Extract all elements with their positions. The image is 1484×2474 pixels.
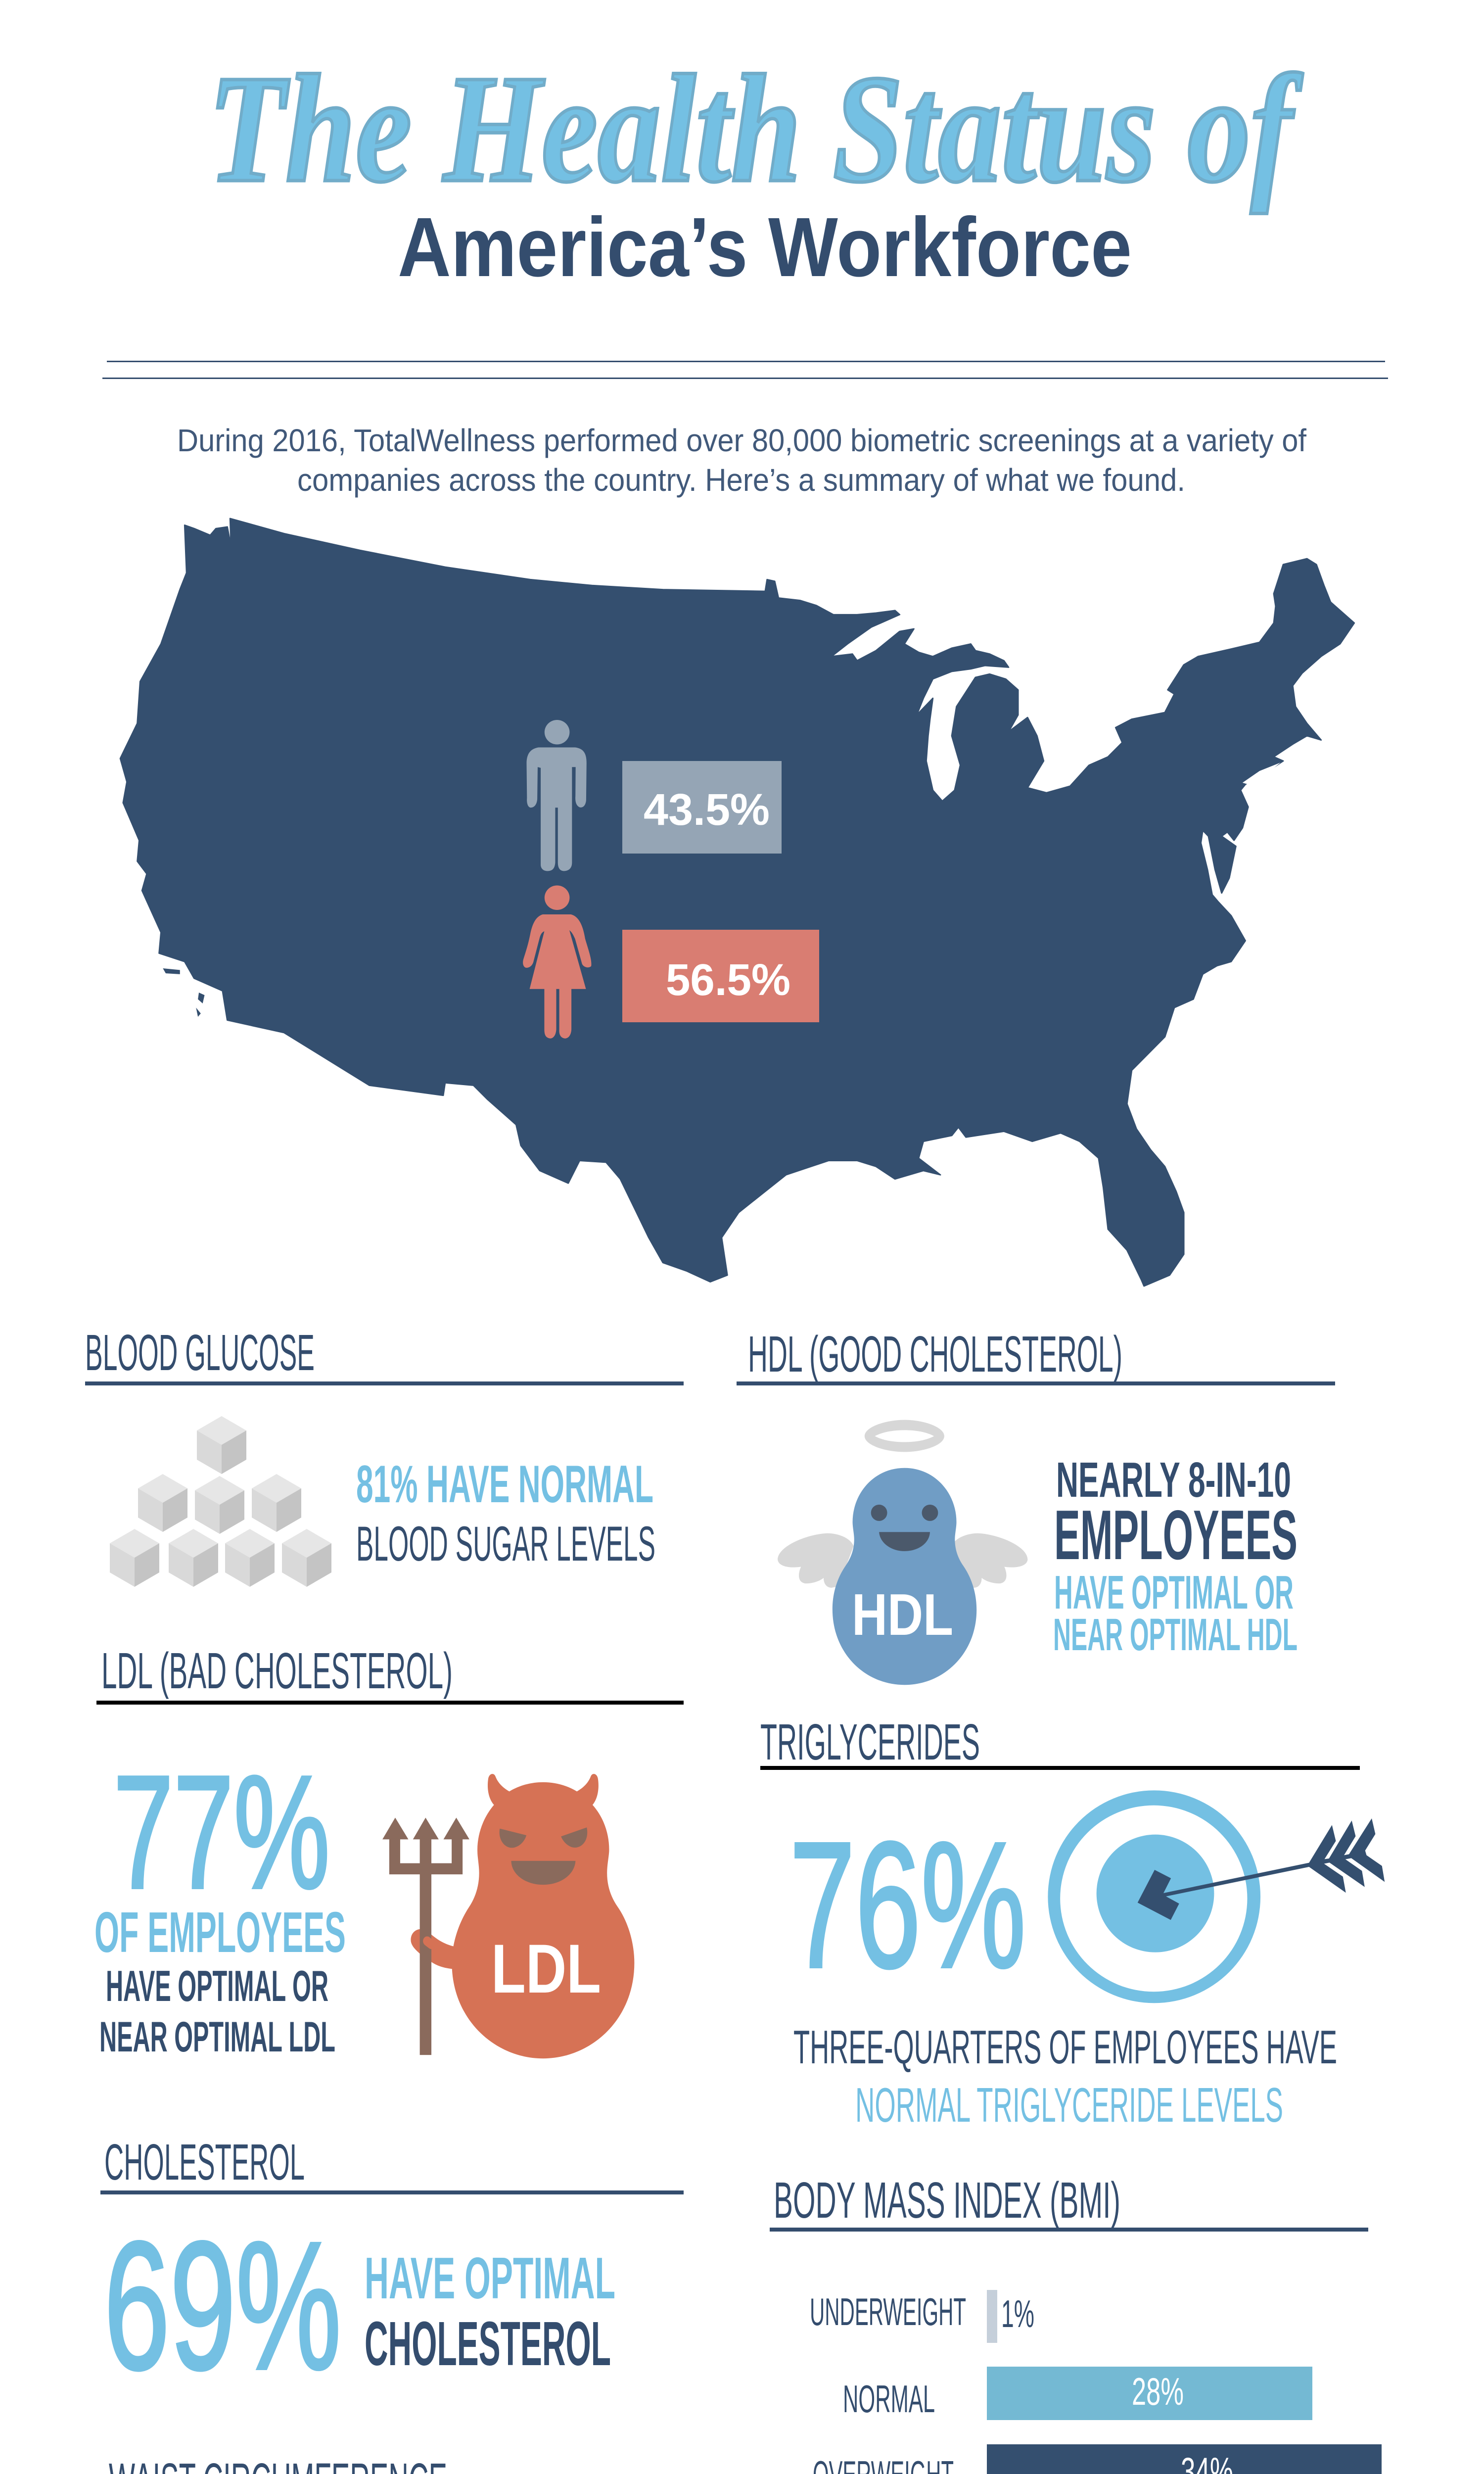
- text: nearly 8-in-10 employees: [1053, 1452, 1298, 1660]
- panel: cholesterol: [100, 2134, 684, 2407]
- icon: man: [526, 720, 587, 871]
- map of the United States: [120, 519, 1354, 1286]
- heading: BLOOD GLUCOSE: [85, 1324, 315, 1381]
- icon: target and arrow: [1048, 1790, 1385, 2003]
- intro text: companies across the country. Here’s a summary of what we found.: [297, 462, 1185, 498]
- icon: woman: [523, 885, 591, 1039]
- icon: HDL angel: HDL: [852, 1582, 953, 1648]
- heading: CHOLESTEROL: [104, 2134, 305, 2190]
- bar: normal: 28%: [1132, 2370, 1184, 2413]
- text: blood sugar levels: BLOOD SUGAR LEVELS: [356, 1516, 655, 1571]
- panel: body mass index: [770, 2172, 1382, 2474]
- male share box: [622, 761, 782, 854]
- heading: HDL (GOOD CHOLESTEROL): [748, 1326, 1122, 1382]
- text: 81%: 81% HAVE NORMAL: [356, 1454, 653, 1514]
- panel: LDL: [94, 1642, 684, 2061]
- text: nearly 8-in-10 employees: NEARLY 8-IN-10: [1056, 1452, 1291, 1508]
- bar: overweight: [813, 2444, 1382, 2474]
- text: nearly 8-in-10 employees: HAVE OPTIMAL OR: [1054, 1566, 1294, 1619]
- text: nearly 8-in-10 employees: EMPLOYEES: [1054, 1496, 1298, 1574]
- icon: HDL angel: [778, 1420, 1027, 1685]
- bar: normal: NORMAL: [843, 2377, 935, 2421]
- icon: LDL devil with trident: [382, 1774, 634, 2058]
- text: have optimal: HAVE OPTIMAL OR: [106, 1961, 328, 2010]
- heading: BODY MASS INDEX (BMI): [774, 2172, 1120, 2229]
- icon: sugar cubes: [110, 1416, 331, 1587]
- text: of employees: OF EMPLOYEES: [94, 1900, 346, 1964]
- panel: HDL: [737, 1326, 1335, 1685]
- female share box: 56.5%: [666, 955, 790, 1005]
- text: have optimal: [99, 1961, 335, 2061]
- title line 2: America’s Workforce: [398, 200, 1132, 294]
- male share box: 43.5%: [644, 785, 770, 835]
- intro text: [177, 423, 1306, 498]
- stat: 76%: 76%: [789, 1805, 1026, 2005]
- bar: underweight: UNDERWEIGHT: [810, 2290, 966, 2333]
- bar: underweight: 1%: [1001, 2292, 1034, 2335]
- icon: LDL devil with trident: LDL: [491, 1930, 601, 2007]
- female share box: [622, 930, 819, 1022]
- title: [208, 44, 1304, 294]
- text: cholesterol: CHOLESTEROL: [365, 2309, 611, 2379]
- bar: normal: [843, 2367, 1312, 2421]
- panel: blood glucose: [85, 1324, 684, 1587]
- text: have optimal: HAVE OPTIMAL: [365, 2245, 615, 2311]
- text: have optimal: NEAR OPTIMAL LDL: [99, 2013, 335, 2061]
- intro text: During 2016, TotalWellness performed over 80,000 biometric screenings at a variety of: [177, 423, 1306, 458]
- bar: underweight: [810, 2290, 1034, 2343]
- heading: LDL (BAD CHOLESTEROL): [101, 1642, 453, 1699]
- stat: 77%: 77%: [113, 1742, 330, 1922]
- stat: 69%: 69%: [104, 2204, 341, 2407]
- heading: TRIGLYCERIDES: [760, 1713, 980, 1770]
- panel: triglycerides: [760, 1713, 1385, 2132]
